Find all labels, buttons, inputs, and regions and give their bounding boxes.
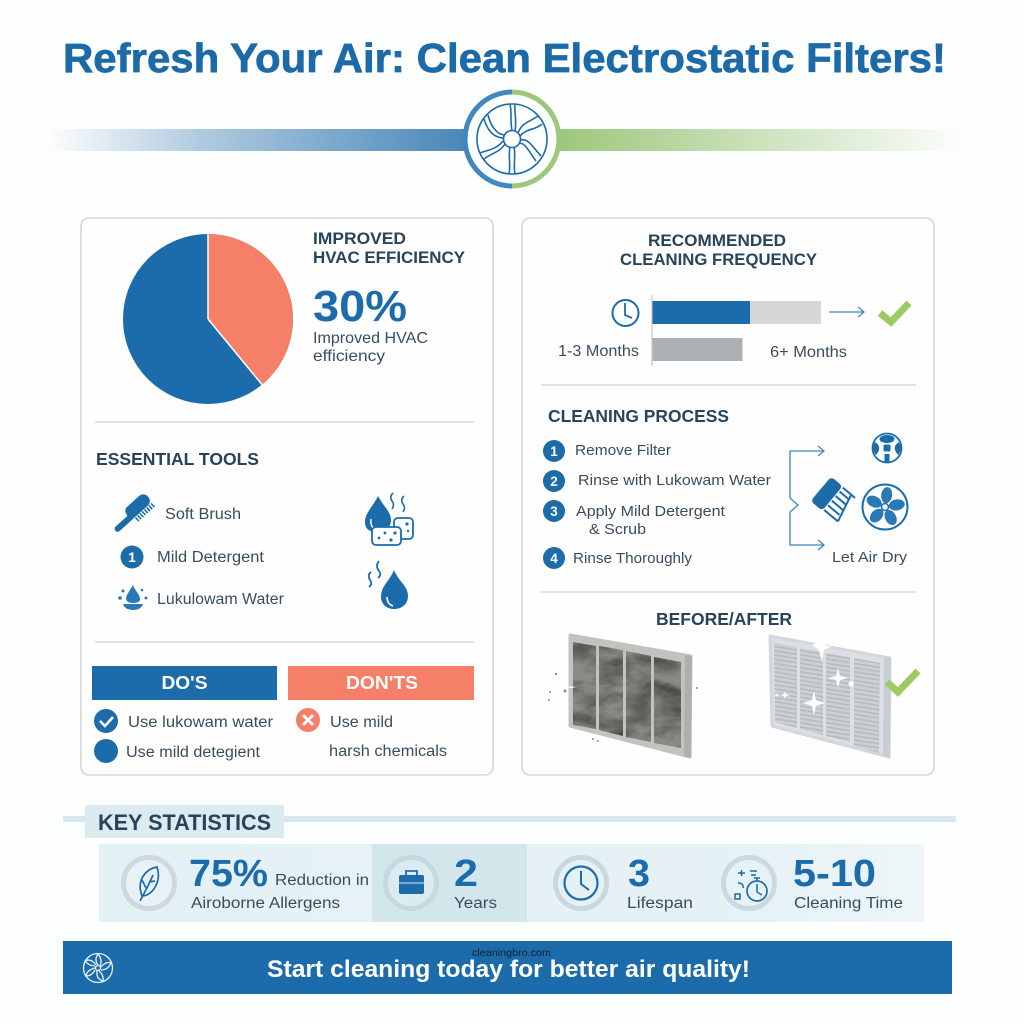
statistics strip <box>99 844 924 922</box>
heading: improved HVAC efficiency <box>313 229 466 267</box>
stat caption <box>313 330 428 365</box>
icon: banner fan <box>84 954 112 982</box>
heading: improved HVAC efficiency: IMPROVED <box>313 229 406 248</box>
icon: fan <box>862 484 908 530</box>
tool: mild detergent label: Mild Detergent <box>157 549 265 566</box>
stat: 3 lifespan: Lifespan <box>627 895 693 912</box>
stat: 3 lifespan <box>556 853 693 912</box>
step 4: 4 <box>550 551 558 566</box>
heading: cleaning process: CLEANING PROCESS <box>548 406 729 426</box>
tool: lukewarm water label: Lukulowam Water <box>157 591 284 608</box>
do: mild detergent <box>94 739 261 763</box>
panel: right <box>522 218 934 775</box>
don't: harsh chemicals: harsh chemicals <box>329 743 447 760</box>
don't: use mild <box>296 708 393 732</box>
watermark: cleaningbro.com <box>472 948 551 959</box>
stat: 2 years <box>386 853 497 912</box>
key statistics heading: KEY STATISTICS <box>98 810 271 835</box>
don'ts header <box>288 666 474 700</box>
icon: clock <box>612 300 638 326</box>
stat caption: efficiency <box>313 348 385 365</box>
step 4 <box>543 547 693 569</box>
heading: before/after: BEFORE/AFTER <box>656 609 792 629</box>
step 2 <box>543 470 771 492</box>
step 2: Rinse with Lukowam Water <box>578 472 771 489</box>
do's header <box>92 666 277 700</box>
heading: essential tools: ESSENTIAL TOOLS <box>96 449 259 469</box>
heading: recommended cleaning frequency <box>620 232 817 269</box>
icon: scrub brush <box>811 477 857 523</box>
panel: left <box>81 218 493 775</box>
step 4: Rinse Thoroughly <box>573 550 693 567</box>
don't: use mild: Use mild <box>330 714 393 731</box>
label: 6+ months: 6+ Months <box>770 344 847 361</box>
stat: 2 years: Years <box>454 895 497 912</box>
stat caption: Improved HVAC <box>313 330 428 347</box>
icon: green check <box>880 303 909 322</box>
stat: 3 lifespan: 3 <box>628 853 650 895</box>
step 3: 3 <box>550 504 558 519</box>
do: mild detergent: Use mild detegient <box>126 744 261 761</box>
icon: header fan <box>477 104 547 174</box>
do: lukewarm water <box>94 709 273 733</box>
bracket arrows <box>790 446 824 550</box>
heading: recommended cleaning frequency: CLEANING FREQUENCY <box>620 251 817 269</box>
stat: 5-10 cleaning time: Cleaning Time <box>794 895 903 912</box>
don'ts header: DON'TS <box>346 672 418 693</box>
icon: warm drop <box>369 561 408 609</box>
icon: green check after <box>887 671 918 692</box>
tool: soft brush label: Soft Brush <box>165 506 241 523</box>
title: Refresh Your Air: Clean Electrostatic Filters! <box>63 35 946 81</box>
step 2: 2 <box>550 474 558 489</box>
label: 1-3 months: 1-3 Months <box>558 343 639 360</box>
call to action banner <box>63 941 952 994</box>
stat: 2 years: 2 <box>454 853 478 895</box>
stat: 75% allergens: 75% <box>189 853 268 895</box>
arrow <box>829 307 864 317</box>
heading: recommended cleaning frequency: RECOMMENDED <box>648 232 786 250</box>
do's header: DO'S <box>162 672 208 693</box>
stat: 75% allergens: Airoborne Allergens <box>191 895 340 912</box>
header band with fan emblem <box>48 90 968 188</box>
heading: improved HVAC efficiency: HVAC EFFICIENCY <box>313 248 466 267</box>
step 3 <box>543 500 726 538</box>
step 1: 1 <box>550 444 558 459</box>
stat: 30%: 30% <box>313 282 407 331</box>
step 1: Remove Filter <box>575 442 671 459</box>
image: dirty filter <box>548 635 698 758</box>
do: lukewarm water: Use lukowam water <box>128 714 273 731</box>
icon: water droplet bowl <box>118 585 148 610</box>
stat: 5-10 cleaning time: 5-10 <box>793 853 876 895</box>
step 1 <box>543 440 671 462</box>
key statistics heading <box>63 805 956 838</box>
step 3: & Scrub <box>589 521 646 538</box>
frequency bar chart <box>652 295 821 366</box>
stat: 75% allergens: Reduction in <box>275 872 369 889</box>
image: clean filter <box>770 636 891 758</box>
icon: number 1: 1 <box>128 549 136 565</box>
label: let air dry: Let Air Dry <box>832 549 908 566</box>
icon: soft brush <box>109 492 154 535</box>
step 3: Apply Mild Detergent <box>576 503 726 520</box>
icon: number 1 <box>120 546 144 568</box>
icon: drop and sponge <box>365 493 413 545</box>
icon: small fan <box>872 434 902 462</box>
pie chart <box>123 234 293 404</box>
stat: 75% allergens <box>124 853 369 912</box>
call to action text: Start cleaning today for better air quality! <box>267 956 750 983</box>
stat: 5-10 cleaning time <box>724 853 903 912</box>
